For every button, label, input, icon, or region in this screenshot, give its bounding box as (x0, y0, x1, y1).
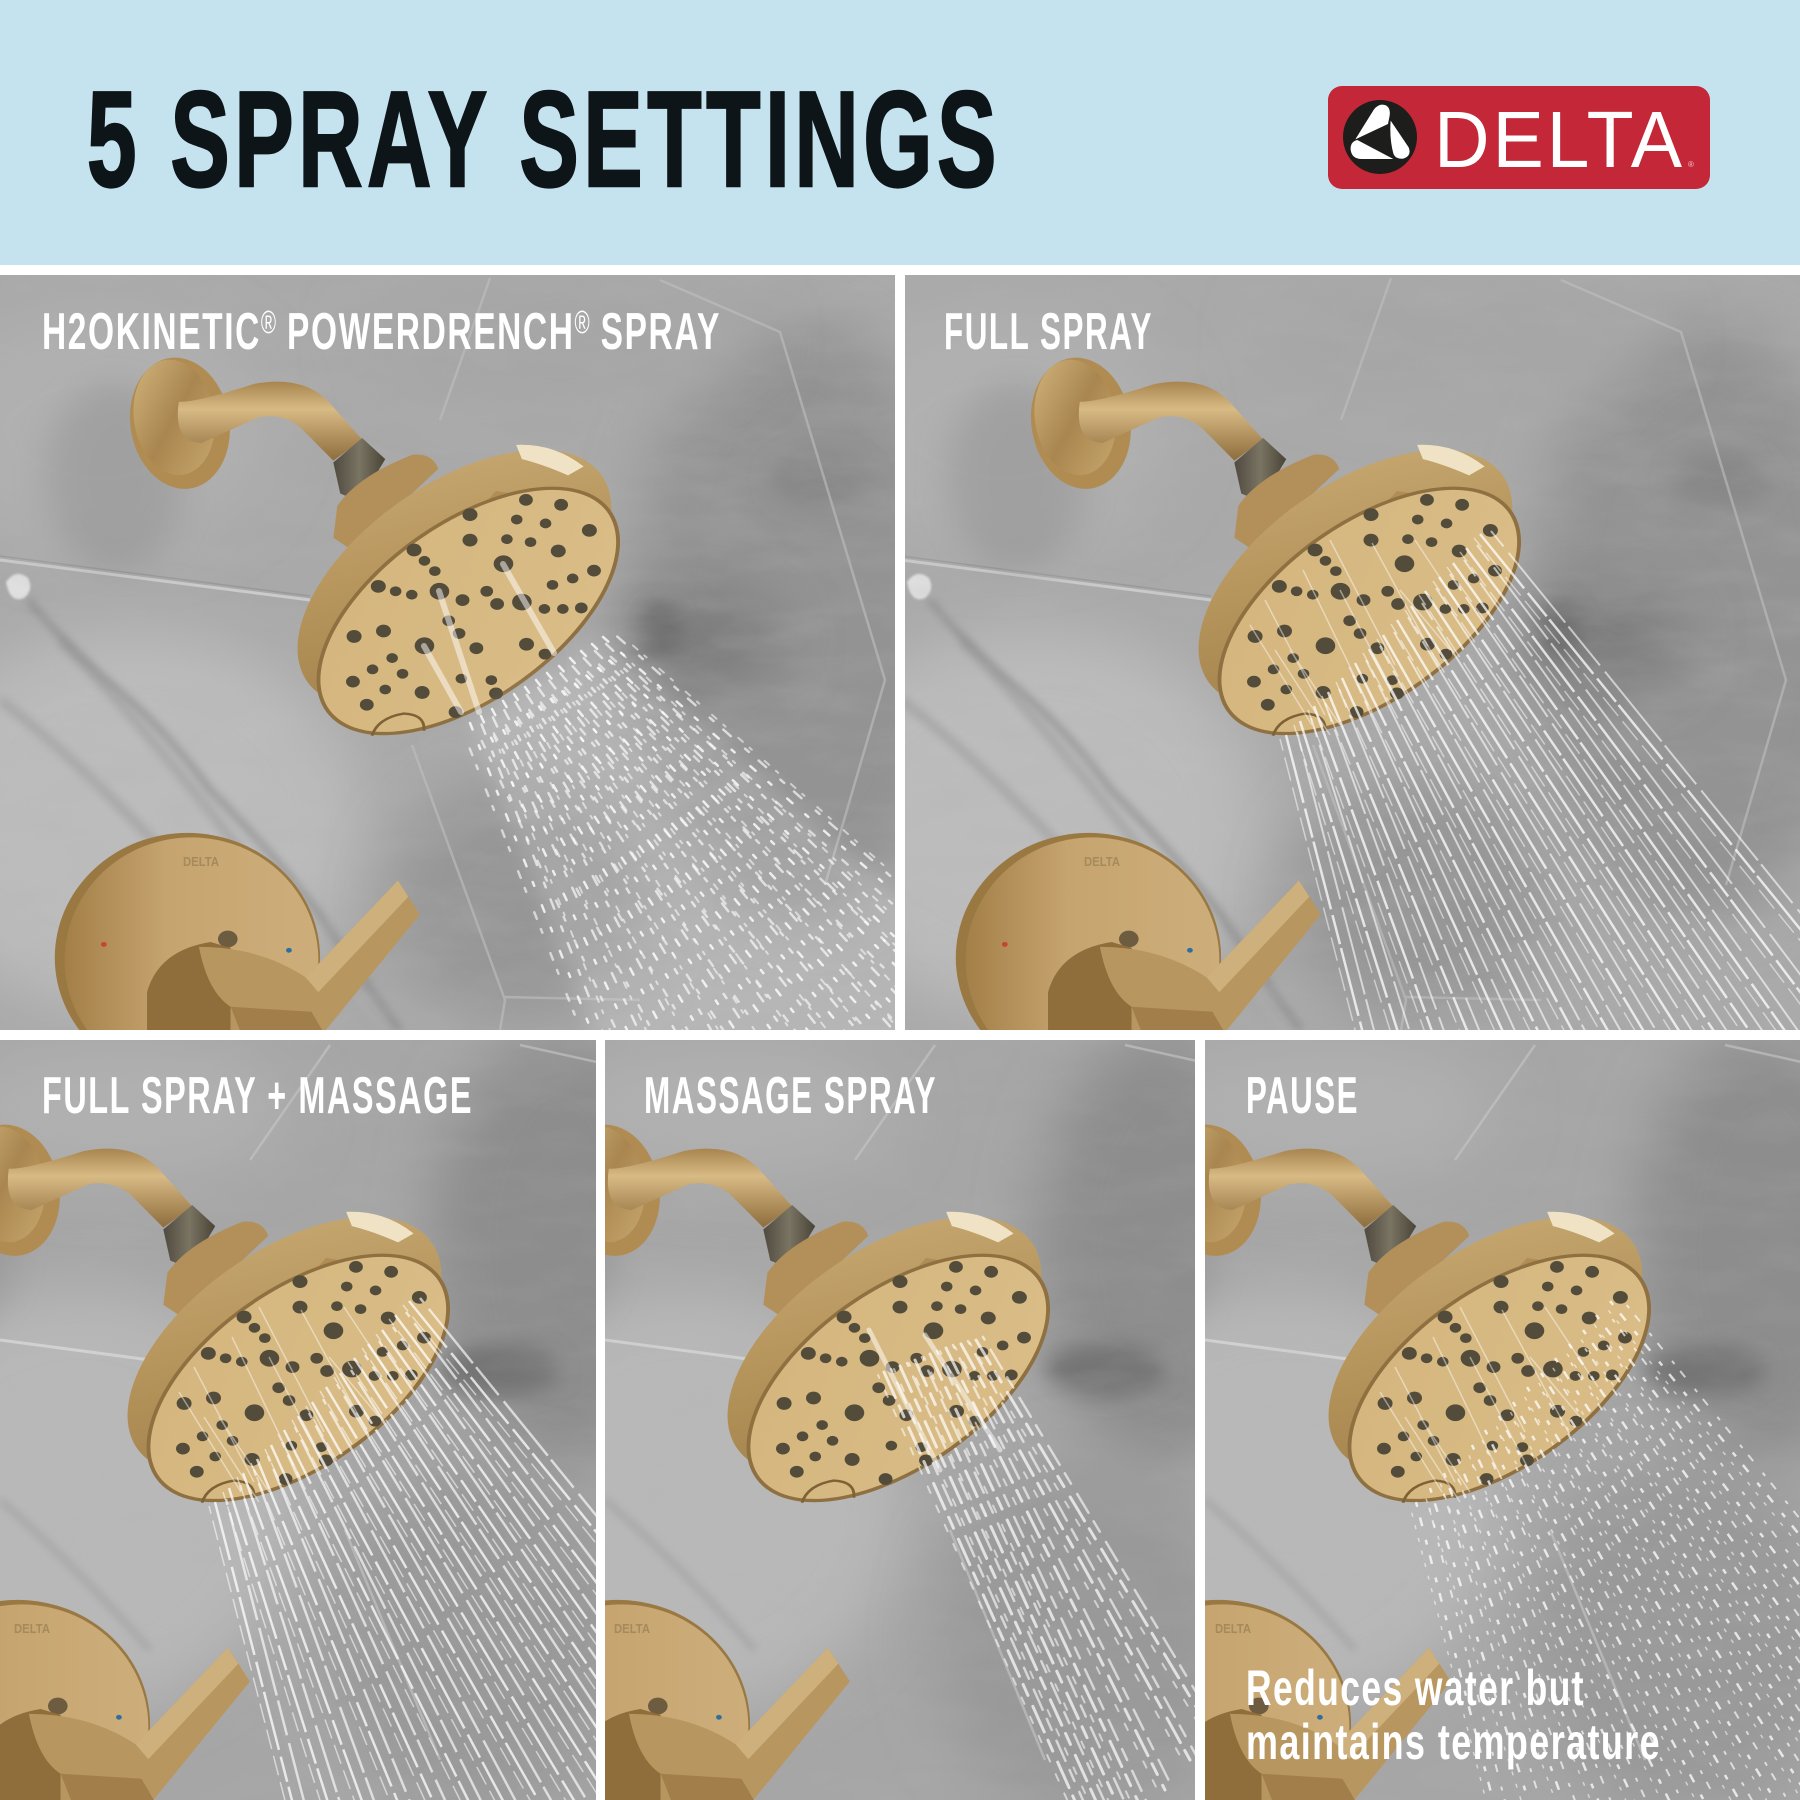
panel: pause (1205, 1040, 1800, 1800)
label: PAUSE (1246, 1067, 1359, 1125)
panel: H2Okinetic PowerDrench spray (0, 275, 895, 1030)
note: Reduces water but (1246, 1660, 1585, 1716)
spray: full plus massage (178, 1297, 596, 1800)
panel: full spray (905, 275, 1800, 1030)
label: SPRAY (590, 303, 721, 361)
Delta logo (1328, 86, 1710, 189)
Delta logo: ® (1688, 160, 1694, 169)
label: FULL SPRAY + MASSAGE (42, 1067, 473, 1125)
label: H2OKINETIC (42, 303, 382, 361)
spray: massage jets (869, 1330, 1217, 1800)
panel: full spray + massage (0, 1040, 596, 1800)
label: MASSAGE SPRAY (644, 1067, 937, 1125)
panel: H2Okinetic PowerDrench spray: DELTA (183, 854, 220, 869)
label: FULL SPRAY (944, 303, 1153, 361)
spray: reduced droplets (1380, 1298, 1800, 1800)
label: ® (575, 304, 590, 340)
label: POWERDRENCH (276, 303, 575, 361)
panel: full spray + massage: DELTA (14, 1621, 51, 1636)
title: 5 SPRAY SETTINGS (87, 63, 1001, 215)
panel: massage spray (605, 1040, 1195, 1800)
spray: full (1250, 531, 1800, 1049)
panel: massage spray: DELTA (614, 1621, 651, 1636)
header band (0, 0, 1800, 265)
panel: full spray: DELTA (1084, 854, 1121, 869)
note (1246, 1660, 1661, 1770)
Delta logo: DELTA (1434, 95, 1685, 184)
spray: aerated droplets (421, 561, 895, 1030)
label: ® (261, 304, 276, 340)
panel: pause: DELTA (1215, 1621, 1252, 1636)
